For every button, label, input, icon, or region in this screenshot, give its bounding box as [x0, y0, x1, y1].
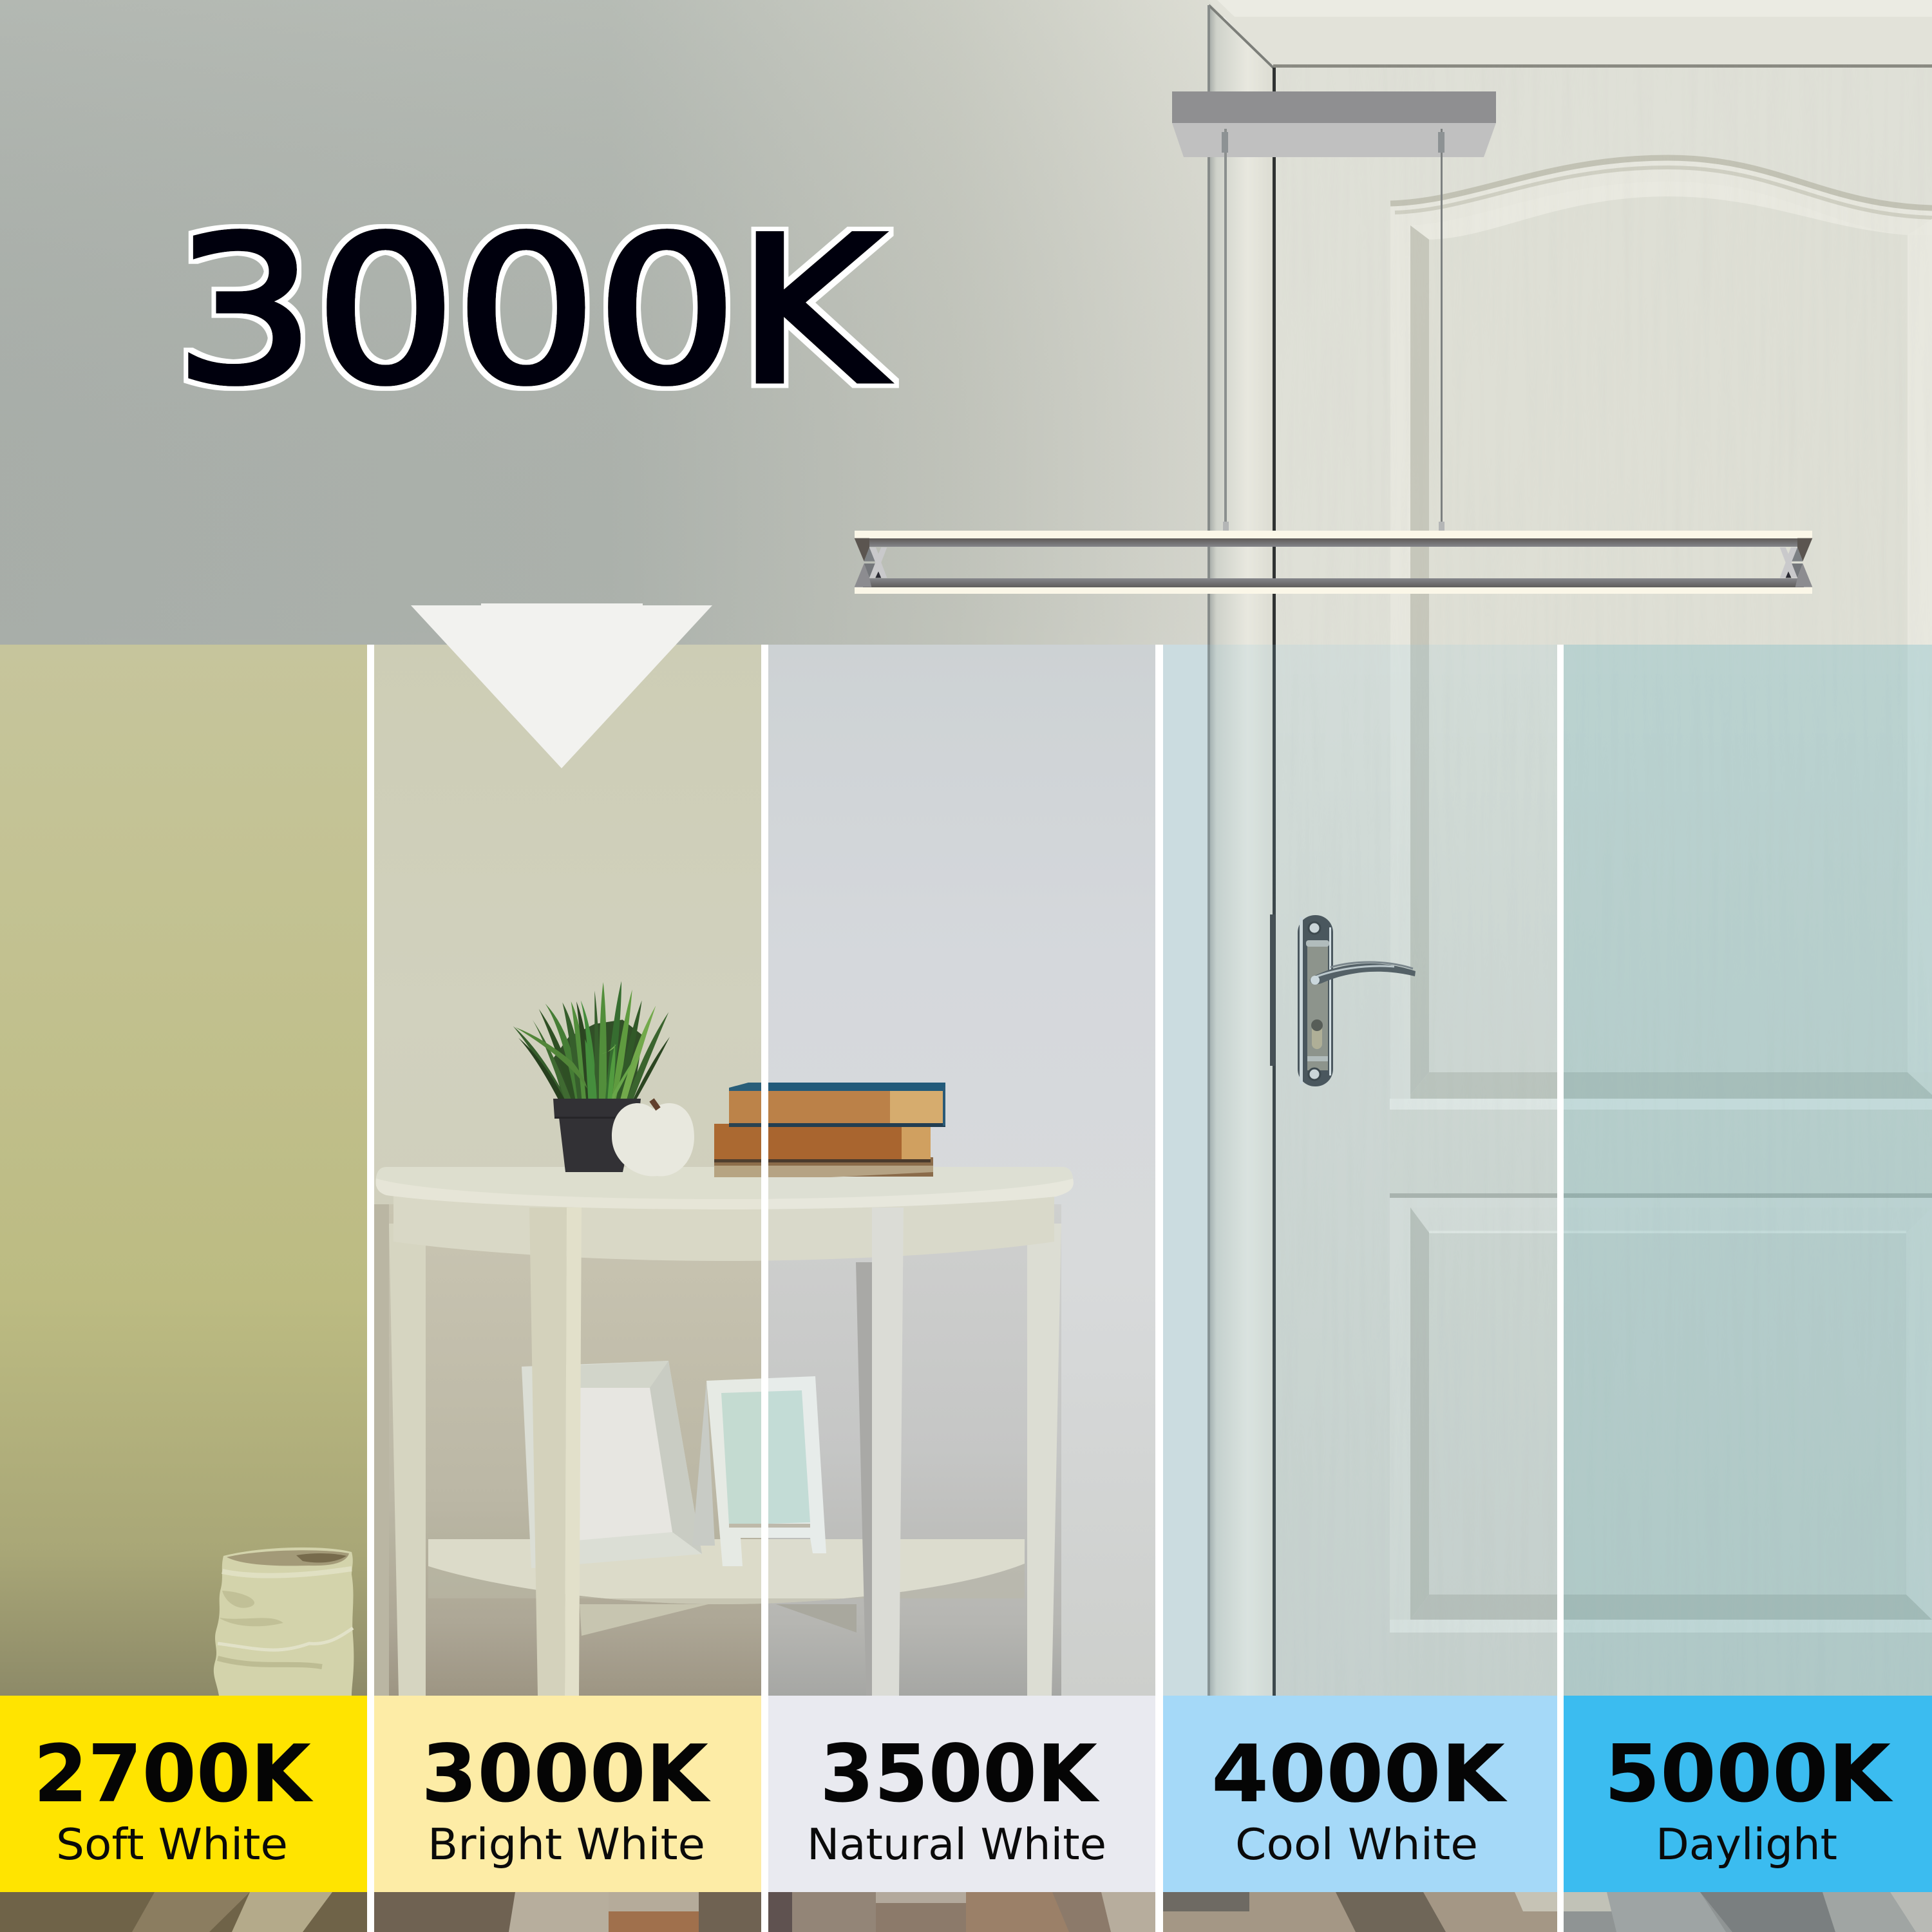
swatch 3000K: 3000K	[421, 1728, 712, 1821]
vertical white dividers	[367, 645, 1564, 1932]
rear right leg	[1027, 1224, 1061, 1696]
lower arm	[855, 578, 1812, 594]
middle door rail	[1390, 1099, 1932, 1110]
ceramic apple	[612, 1100, 694, 1176]
upper arm	[855, 531, 1812, 547]
door frame lintel	[1209, 0, 1932, 68]
swatch 5000K	[1564, 1696, 1932, 1892]
front left leg	[529, 1208, 582, 1696]
stack of books	[714, 1083, 945, 1177]
door handle	[1270, 914, 1416, 1086]
selection triangle pointer	[411, 603, 712, 768]
door frame jamb	[1209, 5, 1273, 1696]
swatch 5000K: Daylight	[1656, 1819, 1837, 1870]
wall photo background	[0, 0, 1224, 1696]
wood grain texture	[1275, 64, 1932, 1700]
shadow under table, cool side	[768, 1204, 1061, 1696]
swatch 5000K: 5000K	[1604, 1728, 1894, 1821]
lower shelf	[428, 1539, 1025, 1636]
potted plant	[513, 981, 670, 1172]
shadow under table, warm side	[374, 1204, 761, 1696]
swatch 2700K: Soft White	[56, 1819, 288, 1870]
end x-bracket left	[855, 538, 887, 587]
table top	[376, 1167, 1074, 1209]
swatch 3500K: 3500K	[820, 1728, 1101, 1821]
suspension wires	[1222, 129, 1444, 531]
rear left leg	[389, 1224, 426, 1696]
end x-bracket right	[1780, 538, 1812, 587]
title 3000K: 3000K	[175, 194, 889, 428]
upper arched panel	[1390, 158, 1932, 1110]
pendant light fixture	[855, 91, 1812, 594]
warm tint on 3000K table	[374, 645, 761, 1696]
swatch 2700K	[0, 1696, 367, 1892]
swatch 3500K	[768, 1696, 1155, 1892]
door leaf	[1273, 68, 1932, 1696]
picture frame right	[692, 1376, 826, 1566]
swatch 2700K: 2700K	[33, 1728, 314, 1821]
door and frame	[1208, 0, 1932, 1700]
swatch 3000K	[374, 1696, 761, 1892]
ceramic vase	[214, 1548, 354, 1696]
lower door panel	[1390, 1198, 1932, 1696]
swatch 4000K	[1163, 1696, 1557, 1892]
floor planks	[0, 1892, 1932, 1932]
front right leg	[856, 1208, 904, 1696]
ceiling canopy	[1172, 91, 1496, 157]
console table	[374, 645, 1074, 1696]
picture frame left	[522, 1361, 702, 1568]
swatch 4000K: 4000K	[1211, 1728, 1508, 1821]
swatch 3000K: Bright White	[428, 1819, 705, 1870]
temperature swatches	[0, 1696, 1932, 1892]
band tint overlays	[1163, 645, 1932, 1696]
swatch 4000K: Cool White	[1235, 1819, 1478, 1870]
swatch 3500K: Natural White	[807, 1819, 1106, 1870]
apron	[393, 1196, 1054, 1261]
